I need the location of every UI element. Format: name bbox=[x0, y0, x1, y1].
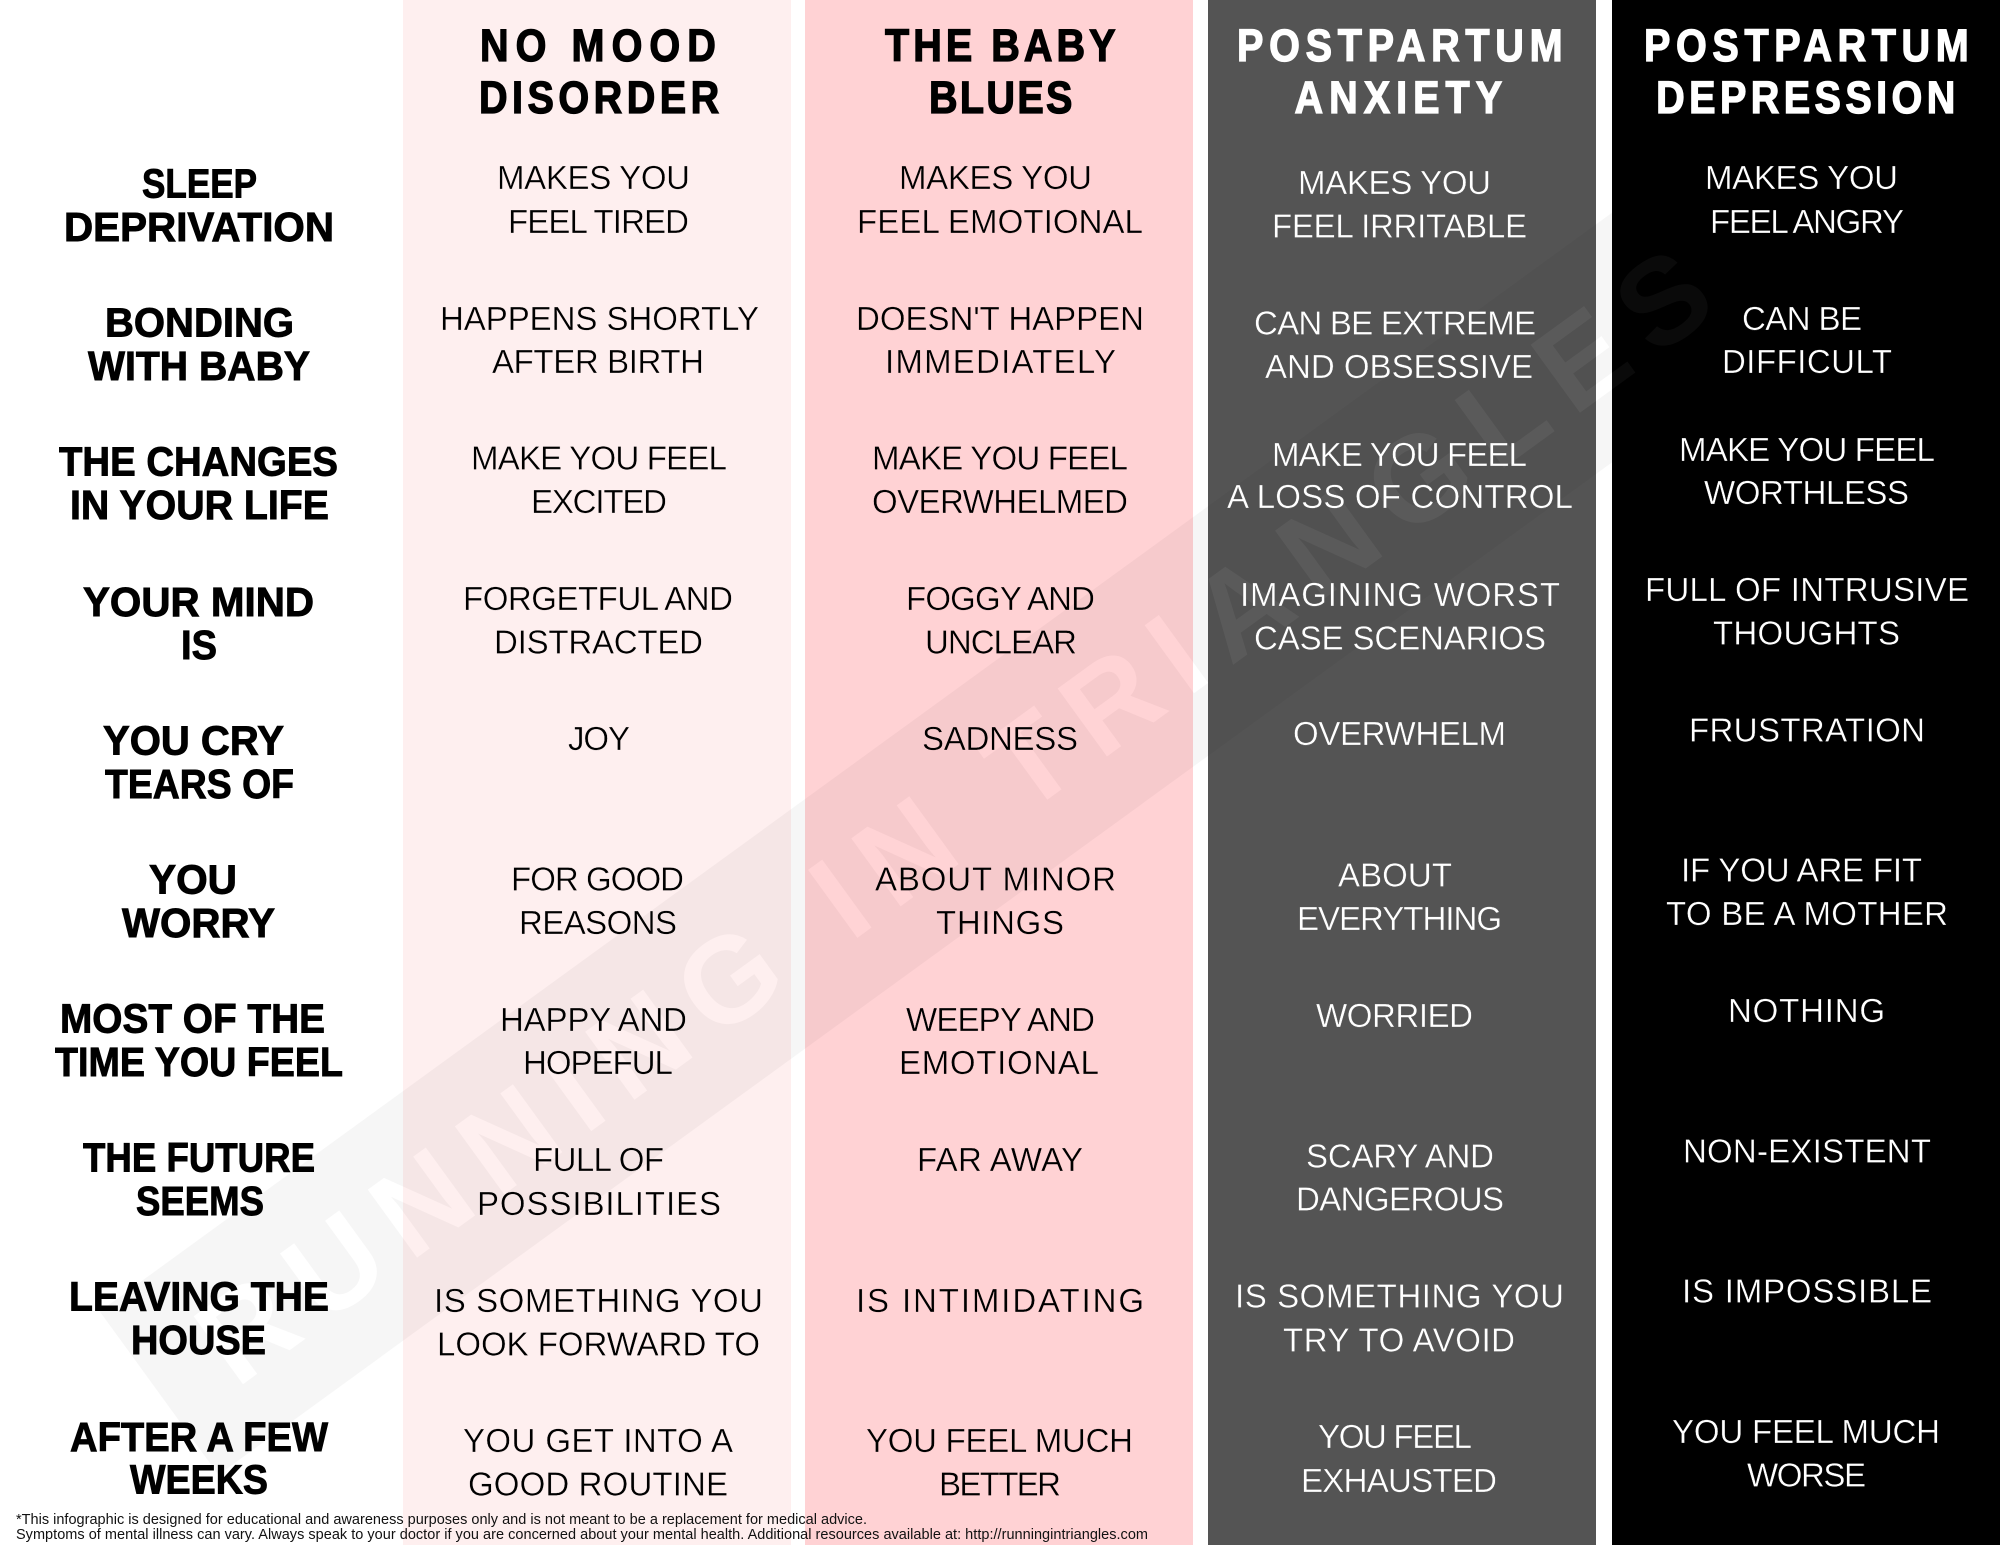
body rows: postpartum anxiety: FEEL IRRITABLE bbox=[1272, 208, 1527, 244]
row label: bonding with baby bbox=[88, 300, 310, 389]
row label: your mind is bbox=[83, 579, 314, 668]
row label: sleep deprivation: DEPRIVATION bbox=[64, 204, 334, 250]
row label: after a few weeks bbox=[70, 1414, 328, 1502]
body rows: the baby blues: UNCLEAR bbox=[925, 624, 1077, 660]
row label: after a few weeks: WEEKS bbox=[130, 1456, 268, 1502]
body rows: postpartum depression: FEEL ANGRY bbox=[1710, 203, 1904, 240]
body rows: postpartum anxiety: CAN BE EXTREME bbox=[1254, 304, 1536, 342]
heading: the baby blues bbox=[885, 21, 1116, 123]
body rows: postpartum anxiety bbox=[1227, 164, 1573, 1499]
body rows: postpartum anxiety: OVERWHELM bbox=[1293, 715, 1506, 752]
body rows: no mood disorder: AFTER BIRTH bbox=[492, 343, 704, 380]
body rows: postpartum anxiety: SCARY AND bbox=[1306, 1138, 1494, 1174]
body rows: postpartum anxiety: A LOSS OF CONTROL bbox=[1227, 478, 1573, 515]
body rows: the baby blues: DOESN'T HAPPEN bbox=[856, 300, 1144, 337]
body rows: postpartum anxiety: DANGEROUS bbox=[1296, 1180, 1504, 1218]
body rows: postpartum depression: YOU FEEL MUCH bbox=[1672, 1413, 1940, 1450]
heading: postpartum depression: DEPRESSION bbox=[1656, 73, 1955, 123]
column: postpartum anxiety bbox=[1227, 21, 1573, 1499]
body rows: no mood disorder: EXCITED bbox=[531, 483, 667, 520]
panel: no mood disorder background bbox=[403, 0, 791, 1545]
body rows: postpartum depression: IS IMPOSSIBLE bbox=[1682, 1272, 1932, 1310]
body rows: postpartum anxiety: EXHAUSTED bbox=[1301, 1462, 1497, 1499]
row label: you worry: YOU bbox=[149, 856, 237, 902]
body rows: postpartum depression: WORTHLESS bbox=[1704, 474, 1909, 511]
row label: you worry bbox=[122, 856, 275, 946]
body rows: the baby blues: OVERWHELMED bbox=[872, 483, 1128, 520]
body rows: the baby blues bbox=[856, 159, 1144, 1502]
body rows: the baby blues: YOU FEEL MUCH bbox=[866, 1422, 1133, 1459]
row label: your mind is: YOUR MIND bbox=[83, 579, 314, 625]
heading: the baby blues: BLUES bbox=[929, 73, 1072, 123]
body rows: no mood disorder: HAPPENS SHORTLY bbox=[440, 300, 759, 337]
body rows: postpartum depression: IF YOU ARE FIT bbox=[1681, 852, 1922, 888]
body rows: postpartum anxiety: EVERYTHING bbox=[1297, 900, 1502, 937]
body rows: no mood disorder: HOPEFUL bbox=[523, 1044, 673, 1081]
body rows: postpartum anxiety: CASE SCENARIOS bbox=[1254, 620, 1546, 656]
body rows: the baby blues: IS INTIMIDATING bbox=[856, 1282, 1144, 1319]
body rows: the baby blues: FAR AWAY bbox=[917, 1141, 1083, 1178]
body rows: postpartum depression: NOTHING bbox=[1728, 992, 1885, 1029]
body rows: no mood disorder: REASONS bbox=[519, 904, 677, 941]
heading: no mood disorder: DISORDER bbox=[479, 73, 719, 123]
body rows: postpartum anxiety: ABOUT bbox=[1338, 856, 1452, 894]
body rows: postpartum depression: FRUSTRATION bbox=[1689, 712, 1925, 748]
body rows: no mood disorder bbox=[434, 159, 763, 1502]
body rows: postpartum anxiety: WORRIED bbox=[1316, 997, 1473, 1034]
body rows: no mood disorder: YOU GET INTO A bbox=[463, 1422, 733, 1459]
row label: most of the time you feel: TIME YOU FEEL bbox=[55, 1039, 343, 1085]
body rows: the baby blues: FEEL EMOTIONAL bbox=[857, 203, 1143, 240]
body rows: the baby blues: THINGS bbox=[936, 904, 1064, 941]
panel: the baby blues background bbox=[805, 0, 1193, 1545]
heading: the baby blues: THE BABY bbox=[885, 21, 1116, 71]
row labels column bbox=[55, 160, 343, 1502]
body rows: no mood disorder: LOOK FORWARD TO bbox=[437, 1326, 760, 1362]
body rows: postpartum anxiety: AND OBSESSIVE bbox=[1265, 348, 1533, 385]
row label: most of the time you feel: MOST OF THE bbox=[60, 996, 325, 1042]
row label: leaving the house bbox=[69, 1274, 329, 1363]
body rows: postpartum anxiety: MAKE YOU FEEL bbox=[1272, 436, 1527, 473]
body rows: the baby blues: WEEPY AND bbox=[906, 1001, 1095, 1038]
body rows: postpartum anxiety: TRY TO AVOID bbox=[1283, 1322, 1515, 1358]
body rows: the baby blues: MAKE YOU FEEL bbox=[872, 440, 1128, 476]
panel: postpartum anxiety background bbox=[1208, 0, 1596, 1545]
row label: sleep deprivation bbox=[64, 160, 334, 250]
body rows: postpartum depression: FULL OF INTRUSIVE bbox=[1645, 571, 1969, 608]
body rows: postpartum depression: CAN BE bbox=[1742, 300, 1862, 337]
row label: you cry tears of bbox=[103, 718, 294, 807]
row label: the changes in your life: IN YOUR LIFE bbox=[70, 482, 329, 528]
body rows: no mood disorder: GOOD ROUTINE bbox=[468, 1466, 728, 1502]
heading: postpartum anxiety: POSTPARTUM bbox=[1237, 21, 1563, 71]
body rows: no mood disorder: MAKE YOU FEEL bbox=[471, 440, 727, 476]
body rows: no mood disorder: IS SOMETHING YOU bbox=[434, 1282, 763, 1319]
row label: leaving the house: LEAVING THE bbox=[69, 1274, 329, 1320]
watermark: running in triangles: RUNNING IN TRIANGLES bbox=[172, 221, 1736, 1410]
row label: sleep deprivation: SLEEP bbox=[142, 160, 257, 206]
body rows: the baby blues: EMOTIONAL bbox=[899, 1044, 1099, 1081]
body rows: postpartum depression: MAKE YOU FEEL bbox=[1679, 431, 1935, 468]
body rows: no mood disorder: FOR GOOD bbox=[511, 860, 684, 898]
heading: no mood disorder bbox=[479, 21, 719, 123]
row label: you worry: WORRY bbox=[122, 900, 275, 946]
row label: after a few weeks: AFTER A FEW bbox=[70, 1414, 328, 1460]
footer disclaimer: *This infographic is designed for educational and awareness purposes only and is not meant to be a replacement for medical advice. bbox=[16, 1512, 867, 1528]
body rows: no mood disorder: FEEL TIRED bbox=[508, 203, 689, 240]
row label: you cry tears of: TEARS OF bbox=[105, 761, 294, 807]
heading: no mood disorder: NO MOOD bbox=[480, 21, 716, 71]
row label: the changes in your life: THE CHANGES bbox=[59, 438, 338, 484]
body rows: the baby blues: ABOUT MINOR bbox=[875, 860, 1116, 898]
panel: postpartum depression background bbox=[1612, 0, 2000, 1545]
body rows: no mood disorder: FORGETFUL AND bbox=[463, 580, 733, 617]
row label: your mind is: IS bbox=[181, 622, 217, 668]
body rows: postpartum depression: DIFFICULT bbox=[1722, 343, 1892, 380]
body rows: no mood disorder: FULL OF bbox=[533, 1141, 664, 1178]
body rows: postpartum depression: NON-EXISTENT bbox=[1683, 1132, 1931, 1170]
row label: most of the time you feel bbox=[55, 996, 343, 1085]
footer disclaimer: Symptoms of mental illness can vary. Always speak to your doctor if you are concerned about your mental health. Additional resources available at: http://runningintriangles.com bbox=[16, 1527, 1148, 1543]
column: the baby blues bbox=[856, 21, 1144, 1502]
row label: leaving the house: HOUSE bbox=[131, 1317, 266, 1363]
body rows: the baby blues: BETTER bbox=[939, 1466, 1061, 1502]
body rows: no mood disorder: POSSIBILITIES bbox=[477, 1185, 721, 1222]
body rows: the baby blues: IMMEDIATELY bbox=[885, 343, 1116, 380]
body rows: no mood disorder: DISTRACTED bbox=[494, 624, 703, 660]
body rows: postpartum anxiety: MAKES YOU bbox=[1298, 164, 1491, 201]
heading: postpartum anxiety: ANXIETY bbox=[1294, 73, 1502, 123]
row label: the future seems bbox=[83, 1134, 315, 1224]
footer disclaimer bbox=[16, 1512, 1148, 1543]
row label: the future seems: THE FUTURE bbox=[83, 1134, 315, 1180]
body rows: postpartum anxiety: YOU FEEL bbox=[1318, 1418, 1472, 1455]
body rows: postpartum depression: MAKES YOU bbox=[1705, 159, 1898, 196]
body rows: no mood disorder: MAKES YOU bbox=[497, 159, 690, 196]
row label: you cry tears of: YOU CRY bbox=[103, 718, 284, 764]
row label: the changes in your life bbox=[59, 438, 338, 528]
body rows: postpartum depression: THOUGHTS bbox=[1713, 614, 1900, 652]
body rows: the baby blues: FOGGY AND bbox=[906, 580, 1095, 617]
body rows: no mood disorder: HAPPY AND bbox=[500, 1001, 687, 1038]
heading: postpartum depression: POSTPARTUM bbox=[1644, 21, 1969, 71]
column: postpartum depression bbox=[1644, 21, 1969, 1493]
body rows: the baby blues: SADNESS bbox=[922, 720, 1078, 757]
heading: postpartum anxiety bbox=[1237, 21, 1563, 123]
body rows: postpartum anxiety: IS SOMETHING YOU bbox=[1235, 1278, 1564, 1314]
column: no mood disorder bbox=[434, 21, 763, 1502]
row label: bonding with baby: BONDING bbox=[105, 300, 294, 346]
body rows: postpartum depression bbox=[1645, 159, 1969, 1494]
body rows: no mood disorder: JOY bbox=[568, 720, 630, 757]
row label: the future seems: SEEMS bbox=[136, 1178, 264, 1224]
body rows: the baby blues: MAKES YOU bbox=[899, 159, 1092, 196]
body rows: postpartum anxiety: IMAGINING WORST bbox=[1240, 576, 1560, 613]
heading: postpartum depression bbox=[1644, 21, 1969, 123]
body rows: postpartum depression: TO BE A MOTHER bbox=[1666, 895, 1948, 932]
body rows: postpartum depression: WORSE bbox=[1747, 1456, 1866, 1494]
row label: bonding with baby: WITH BABY bbox=[88, 343, 310, 389]
